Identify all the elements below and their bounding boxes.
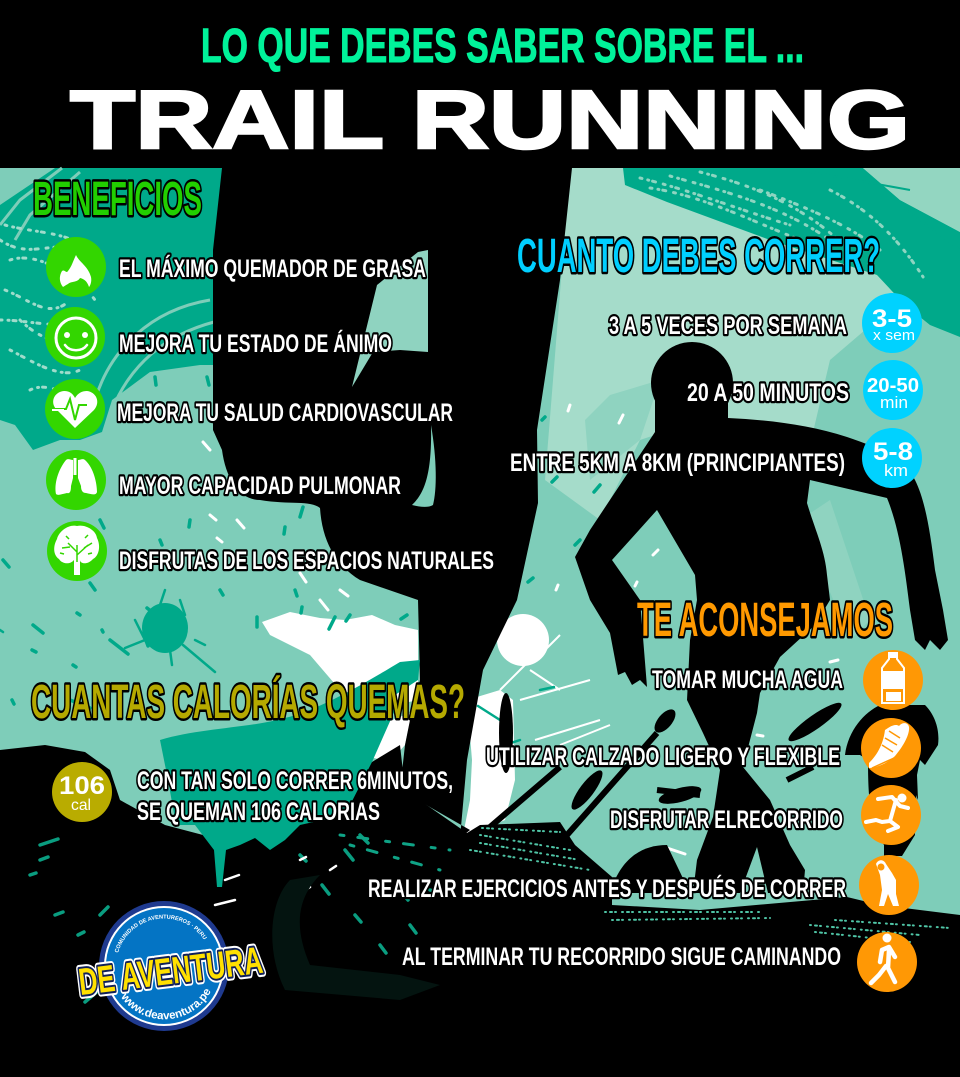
white paint splash <box>262 612 418 710</box>
text: quemador: EL MÁXIMO QUEMADOR DE GRASA <box>119 254 426 283</box>
text: calorias line 2: SE QUEMAN 106 CALORIAS <box>137 798 380 826</box>
text: cardiovascular: MEJORA TU SALUD CARDIOVASCULAR <box>117 399 453 427</box>
lower green splash <box>160 660 420 887</box>
icon: runner <box>861 785 921 845</box>
heading: beneficios: BENEFICIOS <box>33 173 202 226</box>
badge: 5-8 km: km <box>884 461 908 480</box>
panel: calorias <box>31 675 465 826</box>
text: agua: TOMAR MUCHA AGUA <box>652 666 843 694</box>
faint dark paint <box>272 875 440 1000</box>
badge: 3-5 x sem: x sem <box>873 327 915 344</box>
icon: tree <box>47 521 107 581</box>
icon: walker <box>857 932 917 992</box>
white splatter marks <box>203 405 838 854</box>
badge: 5-8 km <box>862 428 922 488</box>
text: minutos: 20 A 50 MINUTOS <box>687 379 849 407</box>
badge: 106 cal: cal <box>71 797 91 814</box>
ground speckles <box>30 828 950 1002</box>
badge: 20-50 min <box>863 360 923 420</box>
icon: smiley <box>45 307 105 367</box>
green splatter marks <box>3 377 600 708</box>
silhouette: small runner behind icons <box>845 705 938 856</box>
text: pulmonar: MAYOR CAPACIDAD PULMONAR <box>119 472 401 500</box>
icon: lungs <box>46 450 106 510</box>
panel: beneficios <box>33 173 494 581</box>
badge: 3-5 x sem: 3-5 <box>872 305 912 333</box>
logo: de aventura: DE AVENTURA <box>76 940 265 1004</box>
text: distancia: ENTRE 5KM A 8KM (PRINCIPIANTES) <box>510 449 845 477</box>
silhouette: large leg <box>213 168 572 838</box>
badge: 20-50 min: 20-50 <box>867 375 919 397</box>
badge: 5-8 km: 5-8 <box>873 438 913 466</box>
title <box>70 20 910 166</box>
teal paint background with splashes <box>0 168 960 928</box>
badge: 106 cal: 106 <box>59 772 105 800</box>
panel: cuanto debes correr <box>510 230 923 488</box>
light gap between legs <box>352 250 428 387</box>
heading: cuantas calorias quemas: CUANTAS CALORÍAS QUEMAS? <box>31 675 465 729</box>
silhouette: runner <box>575 342 948 893</box>
badge: 106 cal <box>52 762 112 822</box>
icon: heart pulse <box>45 379 105 439</box>
badge: 3-5 x sem <box>862 293 922 353</box>
title line: trail running: TRAIL RUNNING <box>70 73 910 166</box>
text: naturales: DISFRUTAS DE LOS ESPACIOS NATURALES <box>119 547 494 575</box>
text: recorrido: DISFRUTAR ELRECORRIDO <box>610 806 843 834</box>
text: calorias line 1: CON TAN SOLO CORRER 6MINUTOS, <box>137 767 453 795</box>
logo: de aventura: www.deaventura.pe <box>122 989 210 1020</box>
icon: bottle <box>863 650 923 710</box>
logo: de aventura <box>76 901 266 1031</box>
icon: running shoe <box>861 718 921 778</box>
logo: de aventura: COMUNIDAD DE AVENTUREROS · PERU <box>114 914 207 952</box>
ground with spikes <box>0 693 960 1077</box>
icon: stretching <box>859 855 919 915</box>
text: veces: 3 A 5 VECES POR SEMANA <box>609 312 847 340</box>
panel: te aconsejamos <box>368 594 923 992</box>
badge: 20-50 min: min <box>880 393 908 412</box>
icon: flame <box>46 237 106 297</box>
text: animo: MEJORA TU ESTADO DE ÁNIMO <box>119 329 392 358</box>
paint drop <box>142 603 188 653</box>
logo: de aventura: DE AVENTURA <box>76 940 265 1004</box>
